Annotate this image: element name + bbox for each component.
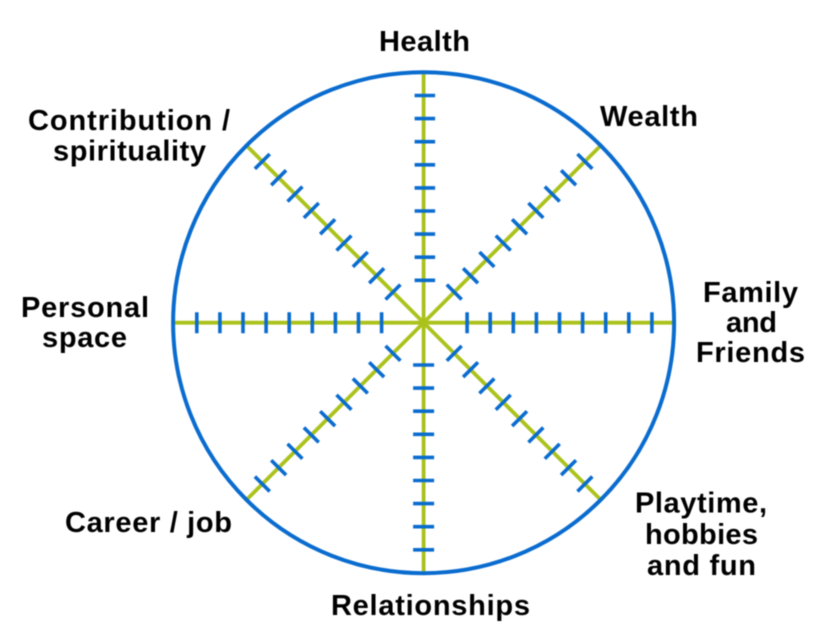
label: Playtime, hobbies and fun: Playtime, <box>635 488 767 520</box>
spoke: Relationships <box>413 323 434 573</box>
label: Playtime, hobbies and fun: and fun <box>647 550 756 582</box>
spoke: Playtime, hobbies and fun <box>416 315 609 508</box>
label: Wealth: Wealth <box>600 101 698 133</box>
label: Health: Health <box>379 26 470 58</box>
spoke: Contribution / spirituality <box>239 138 431 330</box>
spoke: Personal space <box>174 312 424 333</box>
label: Family and Friends: Family <box>703 277 798 309</box>
label: Relationships: Relationships <box>331 590 530 622</box>
label: Contribution / spirituality: spirituality <box>53 136 206 168</box>
label: Playtime, hobbies and fun <box>635 488 767 582</box>
label: Contribution / spirituality <box>28 105 230 168</box>
spoke: Health <box>415 73 435 323</box>
label: Family and Friends <box>696 277 805 369</box>
label: Personal space: space <box>42 322 127 354</box>
label: Family and Friends: and <box>726 307 777 339</box>
outer circle <box>173 72 674 573</box>
spoke: Wealth <box>416 138 609 330</box>
label: Personal space: Personal <box>21 292 149 324</box>
label: Personal space <box>21 292 149 354</box>
spoke: Career / job <box>239 315 431 508</box>
label: Contribution / spirituality: Contribution / <box>28 105 230 137</box>
spoke: Family and Friends <box>424 312 674 333</box>
wheel diagram <box>173 72 674 573</box>
label: Family and Friends: Friends <box>696 337 805 369</box>
label: Playtime, hobbies and fun: hobbies <box>645 519 758 551</box>
label: Career / job: Career / job <box>65 507 232 539</box>
